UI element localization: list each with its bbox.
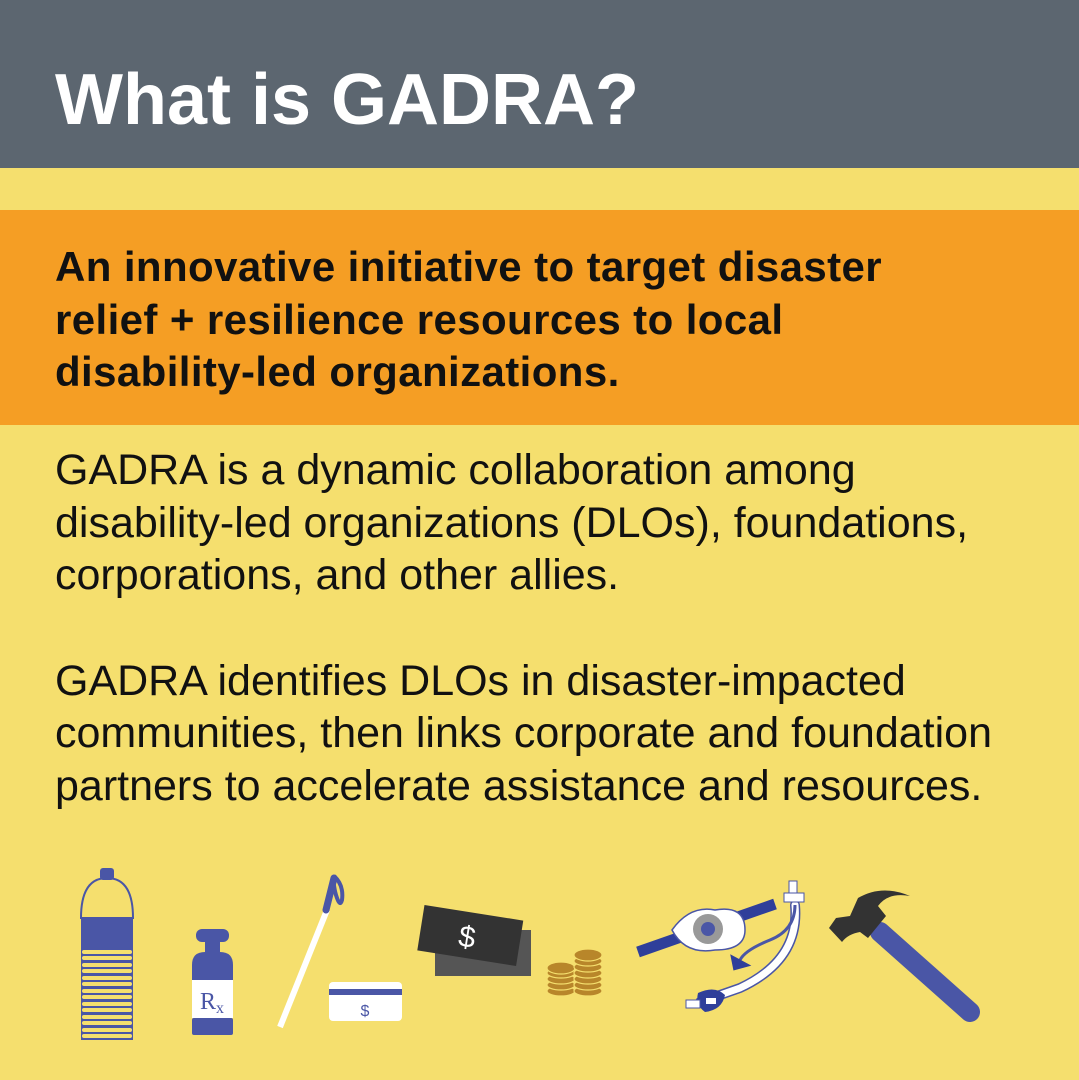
icon: hammer xyxy=(829,890,970,1012)
icon: money xyxy=(417,905,602,996)
body text: partners to accelerate assistance and resources. xyxy=(55,762,982,810)
icon: prescription bottle xyxy=(192,929,233,1035)
summary text: disability-led organizations. xyxy=(55,348,620,395)
icon: water bottle xyxy=(81,868,133,1040)
body text: GADRA is a dynamic collaboration among xyxy=(55,446,856,494)
header xyxy=(0,0,1079,168)
body text: GADRA identifies DLOs in disaster-impacted xyxy=(55,656,906,704)
icon: prescription bottle: x xyxy=(216,1000,224,1017)
icon: card xyxy=(329,982,402,1021)
body text xyxy=(55,446,992,810)
summary text xyxy=(55,243,882,395)
icon: money: $ xyxy=(456,920,478,955)
summary text: relief + resilience resources to local xyxy=(55,296,783,342)
body text: corporations, and other allies. xyxy=(55,551,619,599)
icon: tracheostomy tube xyxy=(638,881,804,1012)
body text: communities, then links corporate and foundation xyxy=(55,709,992,757)
icon: card: $ xyxy=(361,1003,370,1020)
icon: prescription bottle: R xyxy=(200,989,216,1015)
title: What is GADRA? xyxy=(55,60,639,140)
summary text: An innovative initiative to target disaster xyxy=(55,243,882,290)
panel: orange summary xyxy=(0,210,1079,425)
body text: disability-led organizations (DLOs), foundations, xyxy=(55,498,968,546)
icon: white cane xyxy=(280,876,342,1027)
